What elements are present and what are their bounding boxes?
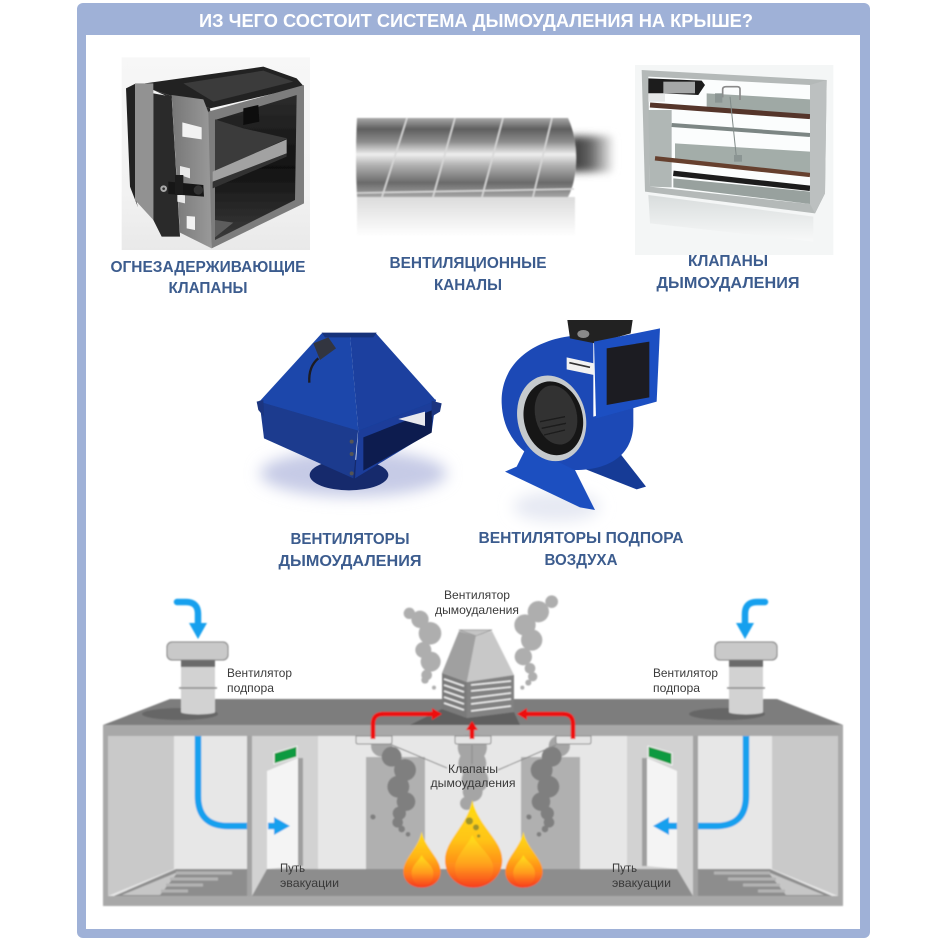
heading: smoke exhaust fans: ВЕНТИЛЯТОРЫ [290, 531, 410, 548]
right pressurisation fan [689, 642, 777, 720]
title: ИЗ ЧЕГО СОСТОИТ СИСТЕМА ДЫМОУДАЛЕНИЯ НА КРЫШЕ? [199, 11, 753, 31]
diagram: building section [103, 595, 843, 906]
label: smoke dampers: Клапаны [448, 762, 498, 776]
leader lines [392, 745, 556, 770]
right partition and exit door [627, 736, 698, 896]
heading: smoke dampers: ДЫМОУДАЛЕНИЯ [656, 275, 800, 292]
heading: smoke exhaust fans [278, 531, 422, 570]
inner doors [366, 757, 580, 869]
outdoor smoke left [404, 608, 441, 690]
left partition and exit door [247, 736, 318, 896]
smoke dampers on ceiling [356, 736, 591, 744]
heading: ventilation ducts [390, 255, 547, 294]
heading: fire dampers [110, 259, 306, 297]
label: smoke dampers [430, 762, 516, 790]
left pressurisation fan [142, 642, 228, 720]
label: right evacuation route: Путь [612, 861, 637, 875]
label: right evacuation route: эвакуации [612, 876, 671, 890]
indoor smoke [370, 733, 570, 837]
label: left evacuation route [280, 861, 339, 890]
label: right supply fan: Вентилятор [653, 666, 718, 680]
label: exhaust fan [435, 588, 519, 617]
label: left supply fan: подпора [227, 681, 274, 695]
heading: pressurisation fans: ВОЗДУХА [544, 552, 618, 569]
image: roof smoke exhaust fan [257, 333, 447, 497]
label: left supply fan [227, 666, 292, 695]
label: smoke dampers: дымоудаления [430, 776, 516, 790]
label: left evacuation route: Путь [280, 861, 305, 875]
flames [403, 800, 543, 888]
image: spiral duct [356, 118, 612, 237]
label: exhaust fan: Вентилятор [444, 588, 510, 602]
heading: pressurisation fans [478, 530, 684, 569]
label: right supply fan [653, 666, 718, 695]
heading: fire dampers: КЛАПАНЫ [168, 280, 248, 297]
building shell [103, 699, 843, 906]
label: left supply fan: Вентилятор [227, 666, 292, 680]
heading: ventilation ducts: КАНАЛЫ [434, 277, 502, 294]
heading: smoke dampers: КЛАПАНЫ [688, 253, 768, 270]
heading: smoke exhaust fans: ДЫМОУДАЛЕНИЯ [278, 553, 422, 570]
heading: smoke dampers [656, 253, 800, 292]
label: right supply fan: подпора [653, 681, 700, 695]
heading: fire dampers: ОГНЕЗАДЕРЖИВАЮЩИЕ [110, 259, 306, 276]
red airflow arrows [373, 708, 573, 739]
heading: ventilation ducts: ВЕНТИЛЯЦИОННЫЕ [390, 255, 547, 272]
heading: pressurisation fans: ВЕНТИЛЯТОРЫ ПОДПОРА [478, 530, 684, 547]
green exit signs [274, 746, 672, 765]
image: smoke damper [635, 65, 833, 255]
outdoor smoke right [514, 595, 558, 690]
label: left evacuation route: эвакуации [280, 876, 339, 890]
label: right evacuation route [612, 861, 671, 890]
central smoke exhaust fan [410, 630, 520, 725]
label: exhaust fan: дымоудаления [435, 603, 519, 617]
image: pressurisation blower [502, 320, 660, 522]
image: fire damper [122, 57, 310, 250]
blue air arrows [177, 602, 765, 835]
